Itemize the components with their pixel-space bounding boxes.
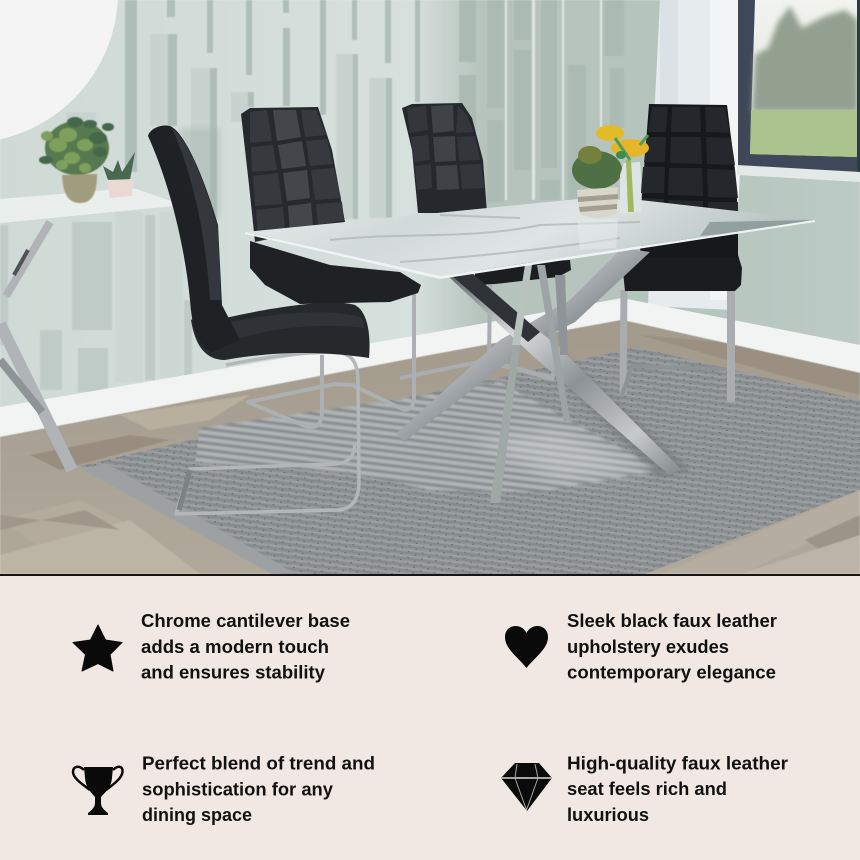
chair: right rear xyxy=(622,104,742,402)
chair: centre rear xyxy=(400,103,571,378)
feature: chrome base xyxy=(73,611,350,682)
feature: trend xyxy=(73,754,375,825)
feature: seat xyxy=(501,754,788,825)
curved back xyxy=(148,125,240,352)
text: chrome base: adds a modern touch xyxy=(141,637,329,657)
wall with geometric panelling xyxy=(0,0,860,440)
yellow flowers xyxy=(596,125,649,160)
console table with plants xyxy=(0,117,174,470)
icon: trophy xyxy=(73,767,123,815)
wooden floor xyxy=(0,320,860,574)
small succulent xyxy=(103,152,135,198)
window xyxy=(737,0,860,182)
console marble top xyxy=(0,188,174,223)
cantilever chrome frame xyxy=(248,292,414,427)
table base: chrome crossed legs xyxy=(396,248,682,503)
text: upholstery: Sleek black faux leather xyxy=(567,611,777,631)
text: trend: Perfect blend of trend and xyxy=(142,754,375,774)
console table legs xyxy=(0,222,72,470)
text: upholstery: contemporary elegance xyxy=(567,662,776,682)
text: trend: dining space xyxy=(142,805,252,825)
chrome legs xyxy=(622,290,731,402)
panel background xyxy=(0,576,860,860)
divider line xyxy=(0,574,860,576)
chrome frame xyxy=(400,275,563,378)
lower wall panels left xyxy=(0,215,192,392)
curtain xyxy=(648,0,740,310)
rug xyxy=(80,347,860,574)
text: chrome base: and ensures stability xyxy=(141,662,325,682)
glass vase xyxy=(620,160,641,213)
panel: features xyxy=(0,576,860,860)
seat xyxy=(191,303,370,360)
text: seat: seat feels rich and xyxy=(567,779,727,799)
text: upholstery: upholstery exudes xyxy=(567,637,729,657)
feature: upholstery xyxy=(505,611,777,682)
centerpiece: flowers and potted plant xyxy=(572,125,649,218)
icon: star xyxy=(73,625,122,671)
table top: marble xyxy=(245,199,815,279)
text: seat: luxurious xyxy=(567,805,649,825)
potted plant xyxy=(572,146,622,218)
mirror xyxy=(0,0,118,143)
eucalyptus plant xyxy=(39,117,114,203)
icon: diamond xyxy=(501,763,552,811)
cantilever chrome frame xyxy=(176,352,359,514)
chair: front left in profile xyxy=(148,125,370,514)
photo: dining room scene xyxy=(0,0,860,574)
icon: heart xyxy=(505,626,548,668)
baseboard xyxy=(0,298,860,437)
text: trend: sophistication for any xyxy=(142,780,333,800)
chair: left rear xyxy=(241,107,421,427)
text: seat: High-quality faux leather xyxy=(567,754,788,774)
text: chrome base: Chrome cantilever base xyxy=(141,611,350,631)
